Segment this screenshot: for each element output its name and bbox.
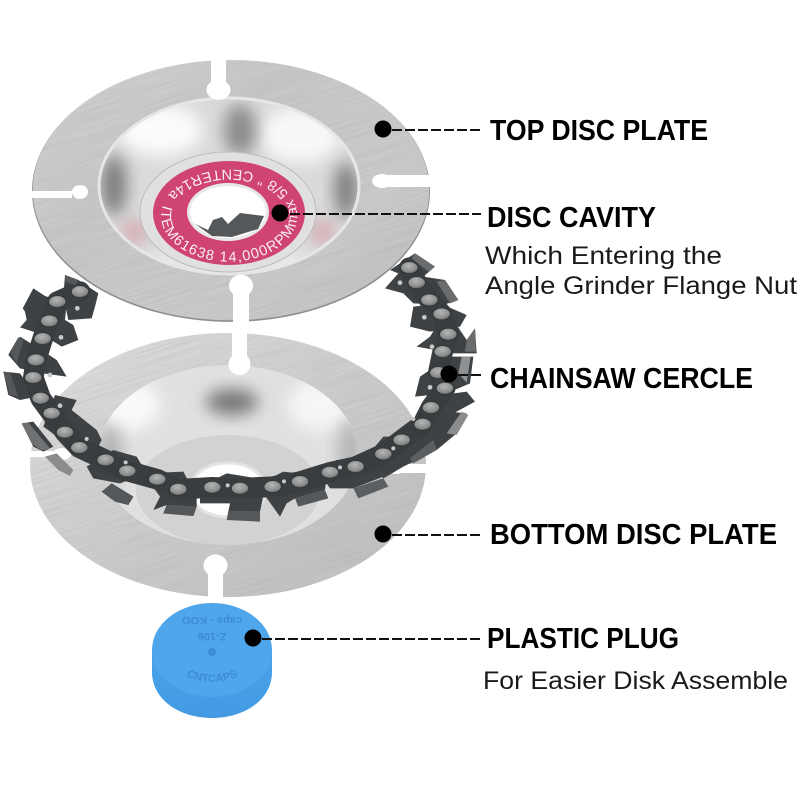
heading: plastic plug: PLASTIC PLUG bbox=[487, 623, 679, 655]
bottom disc centre flat bbox=[136, 435, 320, 545]
text block: disc cavity description: Angle Grinder Flange Nut bbox=[485, 272, 797, 300]
plug moulded text: CNTCAPS bbox=[188, 670, 237, 682]
plug moulded text: Z-106 bbox=[198, 630, 226, 642]
chain highlight teeth bbox=[3, 253, 476, 522]
heading: bottom disc plate: BOTTOM DISC PLATE bbox=[490, 519, 777, 551]
bottom disc bowl bbox=[98, 365, 362, 545]
top disc flange bbox=[32, 60, 430, 322]
centre hole bbox=[187, 183, 269, 241]
plug moulded text bbox=[182, 614, 242, 682]
heading: disc cavity: DISC CAVITY bbox=[487, 202, 656, 234]
plug top face bbox=[152, 603, 272, 697]
bottom disc centre hole bbox=[190, 463, 266, 517]
panel: bottom disc plate bbox=[30, 333, 426, 597]
bottom disc slots bbox=[22, 325, 436, 605]
chain cutters bbox=[3, 253, 477, 520]
plug body bbox=[152, 650, 272, 718]
chain body bbox=[33, 268, 448, 489]
chain rivets bbox=[25, 262, 457, 495]
panel: blue plastic plug bbox=[152, 603, 272, 718]
top disc bowl bbox=[99, 98, 359, 274]
label circular text: ITEM61638 14,000RPMmax 5/8 " CENTER14a bbox=[161, 170, 298, 264]
chain small holes bbox=[48, 280, 434, 487]
heading: top disc plate: TOP DISC PLATE bbox=[490, 115, 708, 147]
text block: disc cavity description: Which Entering the bbox=[485, 242, 722, 270]
heading: bottom disc plate bbox=[374, 519, 777, 551]
text block: disc cavity description bbox=[485, 242, 797, 300]
text block: plastic plug description: For Easier Disk Assemble bbox=[483, 667, 788, 695]
bottom disc flange bbox=[30, 333, 426, 597]
heading: chainsaw cercle: CHAINSAW CERCLE bbox=[490, 363, 753, 395]
heading: top disc plate bbox=[374, 115, 708, 147]
heading: disc cavity bbox=[272, 202, 656, 234]
top disc centre ring bbox=[140, 152, 316, 272]
pink label bbox=[153, 161, 305, 265]
top disc slots bbox=[24, 52, 438, 330]
panel: chainsaw circle bbox=[3, 253, 477, 522]
plug moulded text: caps - KOO bbox=[182, 614, 242, 626]
heading: plastic plug bbox=[244, 623, 679, 655]
panel: top disc plate bbox=[32, 60, 430, 322]
